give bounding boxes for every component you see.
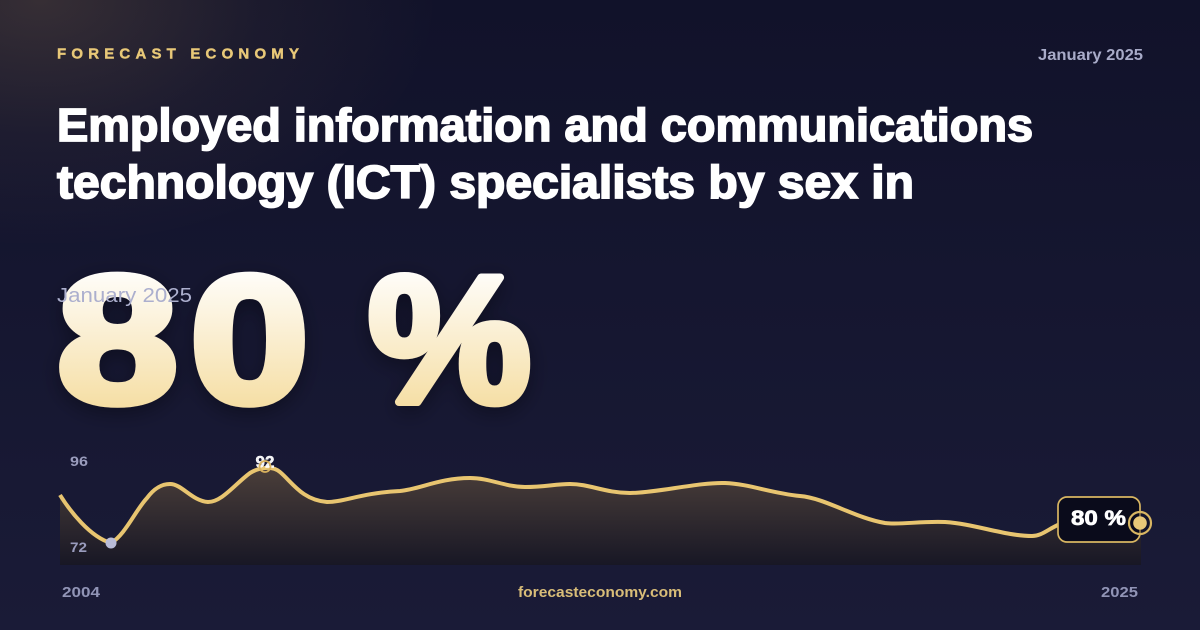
area under line <box>60 468 1141 565</box>
big value <box>57 239 531 441</box>
date overlay: January 2025 <box>57 285 192 307</box>
axis max label: 96 <box>70 453 88 469</box>
min marker <box>106 538 116 548</box>
axis min label: 72 <box>70 539 87 555</box>
big value: 8 <box>57 239 178 441</box>
peak marker <box>260 461 270 472</box>
current value callout <box>1058 497 1140 542</box>
title: technology (ICT) specialists by sex in <box>57 156 914 208</box>
current value marker <box>1129 512 1151 534</box>
date top right: January 2025 <box>1038 47 1143 64</box>
title: Employed information and communications <box>57 99 1033 151</box>
big value: 0 <box>190 239 309 441</box>
big value: % <box>368 239 531 441</box>
sparkline chart <box>60 452 1151 565</box>
peak label: 92 <box>256 452 274 472</box>
current value callout: 80 % <box>1071 507 1126 530</box>
start year: 2004 <box>62 584 101 601</box>
website: forecasteconomy.com <box>518 584 682 601</box>
trend line <box>60 468 1060 543</box>
brand label: FORECAST ECONOMY <box>57 46 299 62</box>
end year: 2025 <box>1101 584 1138 601</box>
title <box>57 99 1033 208</box>
